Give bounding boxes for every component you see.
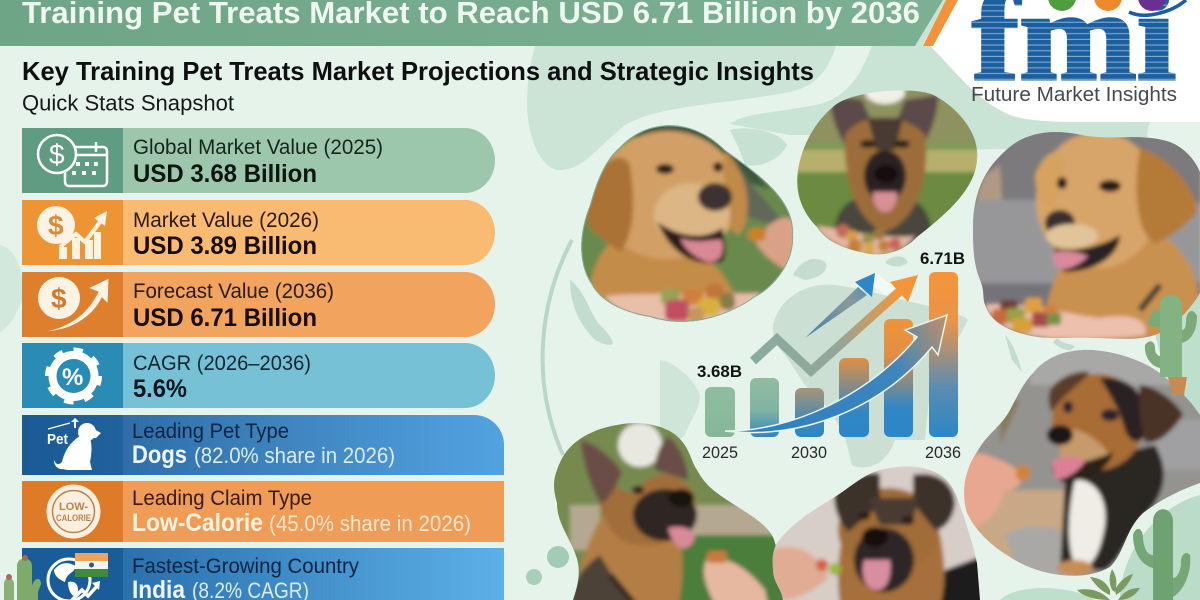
stat row: fastest-growing country (22, 548, 504, 600)
stat row: leading claim type: Leading Claim Type (132, 487, 312, 510)
icon: dollar with arrow: $ (51, 283, 67, 314)
stat row: leading pet type (22, 415, 504, 475)
bar chart: market growth 2025 to 2036: 2030 (791, 443, 827, 462)
plant: right bottom (1077, 569, 1140, 600)
icon: low-calorie badge (46, 484, 100, 538)
dog body (1060, 445, 1164, 570)
icon: dollar with rising bars (37, 206, 107, 259)
stat row: fastest-growing country: Fastest-Growing Country (132, 555, 359, 578)
arrow: zigzag orange trend (753, 275, 918, 371)
photo: golden retriever with treats (581, 125, 794, 322)
icon: dollar with rising bars: $ (48, 210, 64, 241)
bar chart: market growth 2025 to 2036 (697, 249, 965, 462)
icon: pet dog: Pet (47, 431, 68, 448)
arrow: blue trend (805, 273, 875, 338)
icon: low-calorie badge: CALORIE (56, 513, 91, 523)
logo: Future Market Insights: Future Market Insights (971, 84, 1177, 106)
bar chart: market growth 2025 to 2036: 2036 (925, 443, 961, 462)
stat row: forecast value: USD 6.71 Billion (133, 304, 317, 332)
logo backdrop (930, 0, 1200, 122)
cactus: bottom left (4, 555, 41, 600)
dog body (578, 514, 686, 600)
stat row: forecast value: Forecast Value (2036) (133, 280, 334, 303)
stat row: CAGR: 5.6% (133, 375, 187, 403)
header banner (0, 0, 958, 46)
stat row: forecast value (22, 272, 495, 337)
chest (834, 195, 932, 245)
icon: percent gear: % (62, 364, 83, 391)
section heading: Key Training Pet Treats Market Projections and Strategic Insights (22, 56, 814, 86)
stat row: global market value (22, 128, 495, 193)
value label 2036: 6.71B (920, 249, 965, 268)
stat row: leading claim type (22, 481, 504, 542)
stat row: market value 2026: USD 3.89 Billion (133, 232, 317, 260)
icon: dollar with arrow (38, 277, 109, 332)
hand and treat (704, 559, 768, 600)
stat row: leading claim type: Low-Calorie (132, 509, 263, 537)
cactus: right upper (1145, 295, 1197, 395)
decorative dot (526, 569, 542, 585)
icon: dollar and calendar: $ (49, 139, 65, 170)
hand and treat (770, 547, 828, 600)
stat row: market value 2026: Market Value (2026) (133, 209, 319, 232)
treat hand (755, 218, 795, 272)
stat row: leading claim type: (45.0% share in 2026) (269, 511, 471, 536)
stat row: market value 2026 (22, 200, 495, 265)
palm (985, 304, 1146, 339)
stat row: leading pet type: Dogs (132, 441, 187, 469)
hand and treat (960, 453, 1021, 530)
photo: golden retriever on sofa (970, 128, 1200, 343)
axis labels: 2025 (702, 443, 738, 462)
stat row: global market value: Global Market Value (2025) (133, 136, 383, 159)
cactus: right lower (1133, 509, 1190, 600)
value label 2025: 3.68B (697, 362, 742, 381)
icon: percent gear (48, 351, 98, 401)
photo: mixed-breed dog with treat (960, 345, 1200, 580)
icon: dollar and calendar (38, 135, 107, 186)
photo: german shepherd with treats (795, 80, 980, 258)
stat row: CAGR: CAGR (2026–2036) (133, 352, 311, 375)
dog body (1045, 240, 1200, 340)
palm (816, 226, 915, 255)
section subheading: Quick Stats Snapshot (22, 90, 234, 116)
icon: pet dog (47, 418, 101, 470)
stat row: global market value: USD 3.68 Billion (133, 160, 317, 188)
stat row: leading pet type: (82.0% share in 2026) (194, 443, 395, 468)
stat row: leading pet type: Leading Pet Type (132, 420, 289, 443)
icon: low-calorie badge: LOW- (59, 501, 88, 513)
arrow: sweeping blue curve (725, 315, 947, 433)
stat row: CAGR (22, 343, 495, 408)
palm with treats (605, 293, 760, 325)
photo: german shepherd outdoors (550, 420, 790, 600)
photo: german shepherd indoors (770, 465, 985, 600)
dog body (588, 242, 736, 321)
icon: globe with India flag (48, 553, 108, 600)
